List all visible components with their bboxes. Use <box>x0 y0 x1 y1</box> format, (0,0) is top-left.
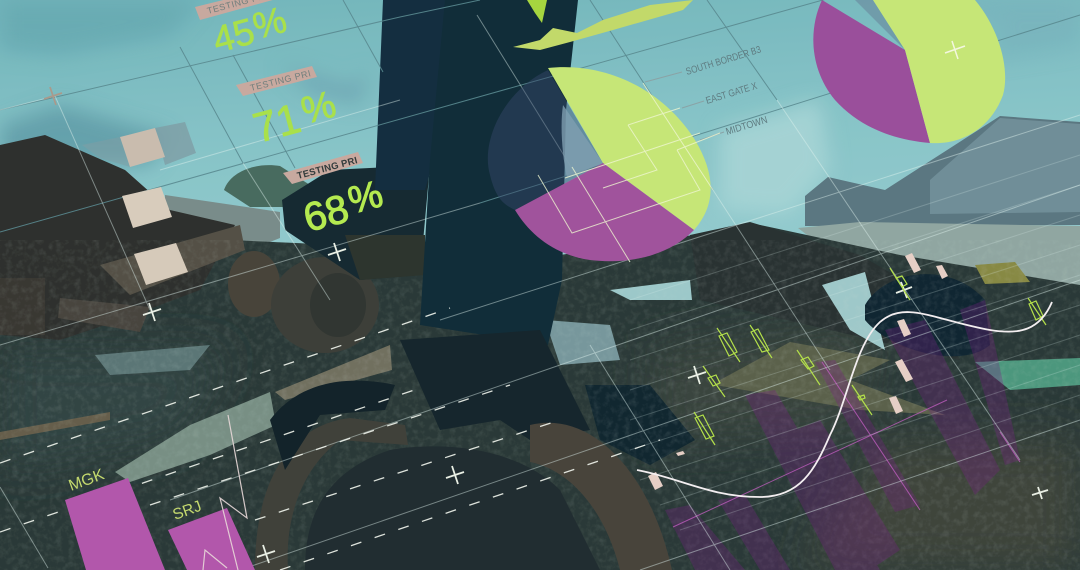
purple translucent bars <box>665 300 1020 570</box>
excavator arm <box>420 0 578 345</box>
label south border: SOUTH BORDER B3 <box>685 44 763 78</box>
map island long <box>513 0 693 50</box>
slice grid <box>945 41 965 59</box>
sky <box>0 0 1080 320</box>
ground <box>0 225 1080 570</box>
left tan block stack <box>82 122 196 285</box>
excavator arm back <box>375 0 450 190</box>
label SRJ: SRJ <box>171 498 204 524</box>
block bottom <box>134 243 188 285</box>
grapple <box>255 330 672 570</box>
debris pile left <box>0 135 235 340</box>
pie magenta slice <box>515 163 694 261</box>
pie blue wedge <box>562 105 603 178</box>
bar SRJ <box>168 508 255 570</box>
clouds <box>0 0 1080 215</box>
bar chart bottom left <box>65 415 255 570</box>
label line south border <box>645 72 682 82</box>
testing labels and percentages <box>195 0 389 241</box>
value 45%: % <box>248 0 291 47</box>
fine lines lower right <box>630 155 1080 530</box>
value 68%: % <box>344 173 387 223</box>
left shed <box>165 195 280 270</box>
value 71%: % <box>297 83 340 133</box>
dashed diagonal lines <box>0 308 660 570</box>
pie lime slice <box>548 67 711 230</box>
white trend curve <box>637 302 1052 497</box>
slice lime <box>873 0 1005 143</box>
label line east gate <box>682 101 704 108</box>
pie overlay lines <box>538 83 720 262</box>
texture <box>0 240 1080 570</box>
sky lines dark <box>0 0 1080 232</box>
label midtown: MIDTOWN <box>725 115 769 138</box>
building <box>805 116 1080 226</box>
label east gate: EAST GATE X <box>705 81 759 107</box>
green candles <box>694 268 1046 445</box>
label line midtown <box>700 132 724 140</box>
label 3: TESTING PRI <box>296 155 359 182</box>
pie chart top right <box>813 0 1005 143</box>
block top <box>120 128 165 167</box>
value 45%: 45 <box>208 10 259 61</box>
tree <box>224 165 310 207</box>
label 2: TESTING PRI <box>249 68 312 93</box>
rubble on ground <box>115 392 276 482</box>
label 1 <box>195 0 280 20</box>
label MGK: MGK <box>67 466 107 495</box>
map silhouette <box>513 0 693 50</box>
block top left grey <box>82 137 130 167</box>
bar MGK <box>65 478 165 570</box>
excavator body <box>282 165 430 280</box>
pie chart large <box>488 67 720 262</box>
cross markers <box>44 87 1048 563</box>
value 71%: 71 <box>248 94 305 152</box>
value 68%: 68 <box>299 187 353 241</box>
spike line <box>203 415 247 570</box>
ground tones <box>0 320 1080 570</box>
wheels <box>228 251 379 353</box>
slice magenta <box>813 0 930 143</box>
map island upper <box>527 0 547 23</box>
slice blue <box>855 0 905 50</box>
pie dark slice <box>488 70 603 210</box>
wall <box>798 222 1080 290</box>
label 3 <box>283 152 363 184</box>
label 2 <box>236 66 317 96</box>
location labels <box>645 44 769 140</box>
candlestick chart <box>648 253 1046 490</box>
debris pile right <box>690 222 960 360</box>
magenta thin lines <box>673 362 1020 527</box>
block middle <box>122 187 172 228</box>
block top grey <box>155 122 196 165</box>
pale candles <box>648 253 948 490</box>
